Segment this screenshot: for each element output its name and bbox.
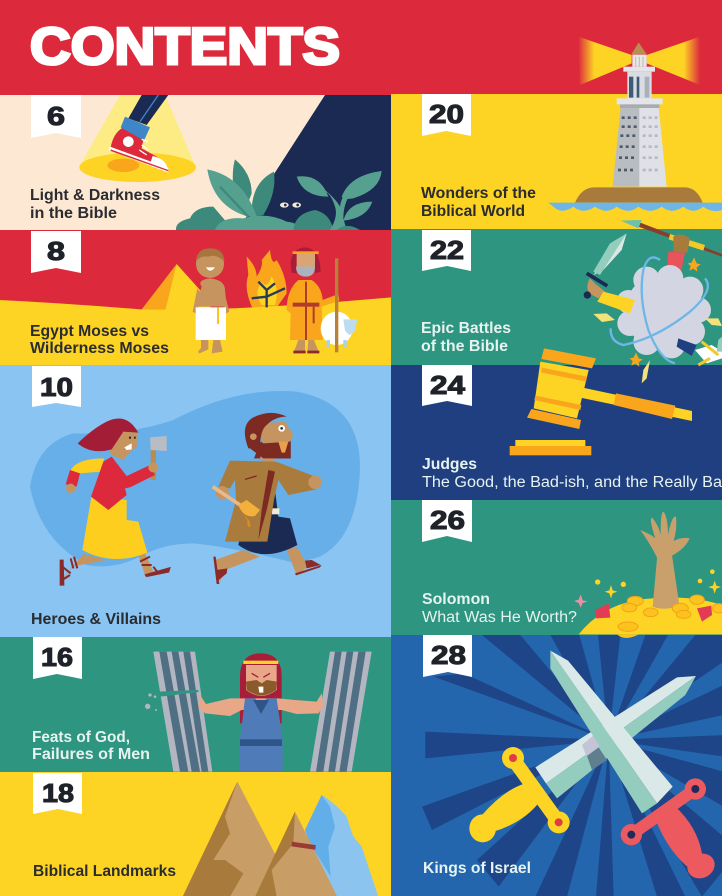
heading: light and darkness: in the Bible (30, 205, 117, 222)
page number 20: 20 (429, 99, 464, 129)
subheading: judges: The Good, the Bad-ish, and the Really Ba (422, 474, 722, 491)
heading: heroes and villains: Heroes & Villains (31, 611, 161, 628)
panel: biblical landmarks (0, 772, 392, 896)
page number 10 (32, 366, 81, 407)
illustration: plants with eyes (176, 159, 382, 230)
page number 18: 18 (42, 778, 74, 808)
illustration: Samson and pillars (145, 652, 372, 772)
title: CONTENTS (30, 18, 340, 76)
heading: wonders: Wonders of the (421, 185, 536, 202)
illustration: foot in spotlight (79, 95, 196, 182)
heading: feats of God: Failures of Men (32, 746, 150, 763)
heading: kings of Israel: Kings of Israel (423, 860, 531, 877)
figure: bearded man with honeycomb (213, 413, 322, 584)
page number 26 (422, 500, 472, 542)
page number 26: 26 (430, 505, 465, 535)
page number 28: 28 (431, 640, 466, 670)
heading: light and darkness: Light & Darkness (30, 187, 160, 204)
header band (0, 0, 722, 95)
heading: judges: Judges (422, 456, 477, 473)
panel: heroes and villains (0, 365, 392, 637)
panel: feats of God (0, 637, 392, 773)
page number 20 (422, 94, 471, 136)
subheading: Solomon: What Was He Worth? (422, 609, 577, 626)
page number 22 (422, 230, 471, 271)
panel: Solomon (391, 500, 722, 638)
heading: Egypt Moses: Wilderness Moses (30, 340, 169, 357)
illustration: lighthouse (548, 37, 722, 211)
panel: epic battles (421, 220, 722, 383)
panel: light and darkness (0, 95, 391, 230)
illustration: pyramid, boy, bush, Moses, sheep (0, 247, 391, 367)
figure: woman with axe (61, 418, 169, 585)
heading: Solomon: Solomon (422, 591, 490, 608)
illustration: crossed swords (469, 651, 719, 883)
page number 10: 10 (40, 372, 73, 402)
page number 24 (422, 365, 472, 406)
page number 28 (423, 635, 472, 677)
illustration: gavel (510, 348, 692, 455)
heading: wonders: Biblical World (421, 203, 525, 220)
page number 8 (31, 231, 81, 273)
page number 22: 22 (430, 235, 464, 265)
illustration: sunburst (422, 635, 722, 896)
panel: wonders (391, 37, 722, 230)
page number 6 (31, 95, 81, 138)
illustration: battle cloud (584, 220, 722, 383)
panel: kings of Israel (391, 635, 722, 896)
heading: biblical landmarks: Biblical Landmarks (33, 863, 176, 880)
illustration: mountains (183, 782, 378, 896)
heading: feats of God: Feats of God, (32, 729, 130, 746)
page number 24: 24 (430, 370, 466, 400)
heading: Egypt Moses: Egypt Moses vs (30, 323, 149, 340)
panel: Egypt Moses (0, 230, 391, 367)
page number 6: 6 (47, 101, 65, 131)
page number 18 (33, 773, 82, 814)
illustration: Jael and Samson running (30, 391, 360, 585)
heading: epic battles: Epic Battles (421, 320, 511, 337)
page number 16 (33, 637, 82, 679)
page number 16: 16 (41, 642, 73, 672)
heading: epic battles: of the Bible (421, 338, 508, 355)
illustration: hand in treasure (574, 512, 722, 638)
page number 8: 8 (47, 236, 65, 266)
panel: judges (391, 229, 722, 500)
